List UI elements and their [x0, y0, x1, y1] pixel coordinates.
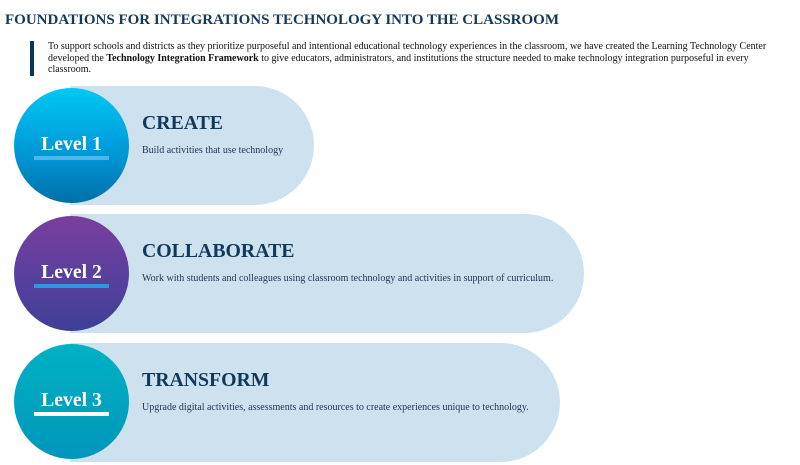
badge: level 3: Level 3 — [41, 389, 102, 411]
panel: level 3 — [14, 343, 560, 462]
badge: level 1: Level 1 — [41, 133, 102, 155]
badge: level 1 — [14, 88, 129, 203]
description 3: Upgrade digital activities, assessments and resources to create experiences unique to technology. — [142, 402, 529, 413]
intro text block: To support schools and districts as they prioritize purposeful and intentional educational technology experiences in the classroom, we have created the Learning Technology Center developed the Technology Integration Framework to give educators, administrators, and institutions the structure needed to make technology integration purposeful in every classroom. — [48, 41, 766, 75]
badge: level 3 — [14, 344, 129, 459]
heading: transform: TRANSFORM — [142, 369, 269, 391]
title: FOUNDATIONS FOR INTEGRATIONS TECHNOLOGY INTO THE CLASSROOM — [5, 12, 559, 28]
description 1: Build activities that use technology — [142, 145, 283, 156]
heading: collaborate: COLLABORATE — [142, 240, 294, 262]
pill background 1 — [70, 86, 314, 205]
panel: level 1 — [14, 86, 314, 205]
badge: level 2: Level 2 — [41, 261, 102, 283]
description 2: Work with students and colleagues using classroom technology and activities in support of curriculum. — [142, 273, 553, 284]
panel: level 2 — [14, 214, 584, 333]
heading: create: CREATE — [142, 112, 223, 134]
badge: level 2 — [14, 216, 129, 331]
pill background 3 — [70, 343, 560, 462]
pill background 2 — [70, 214, 584, 333]
